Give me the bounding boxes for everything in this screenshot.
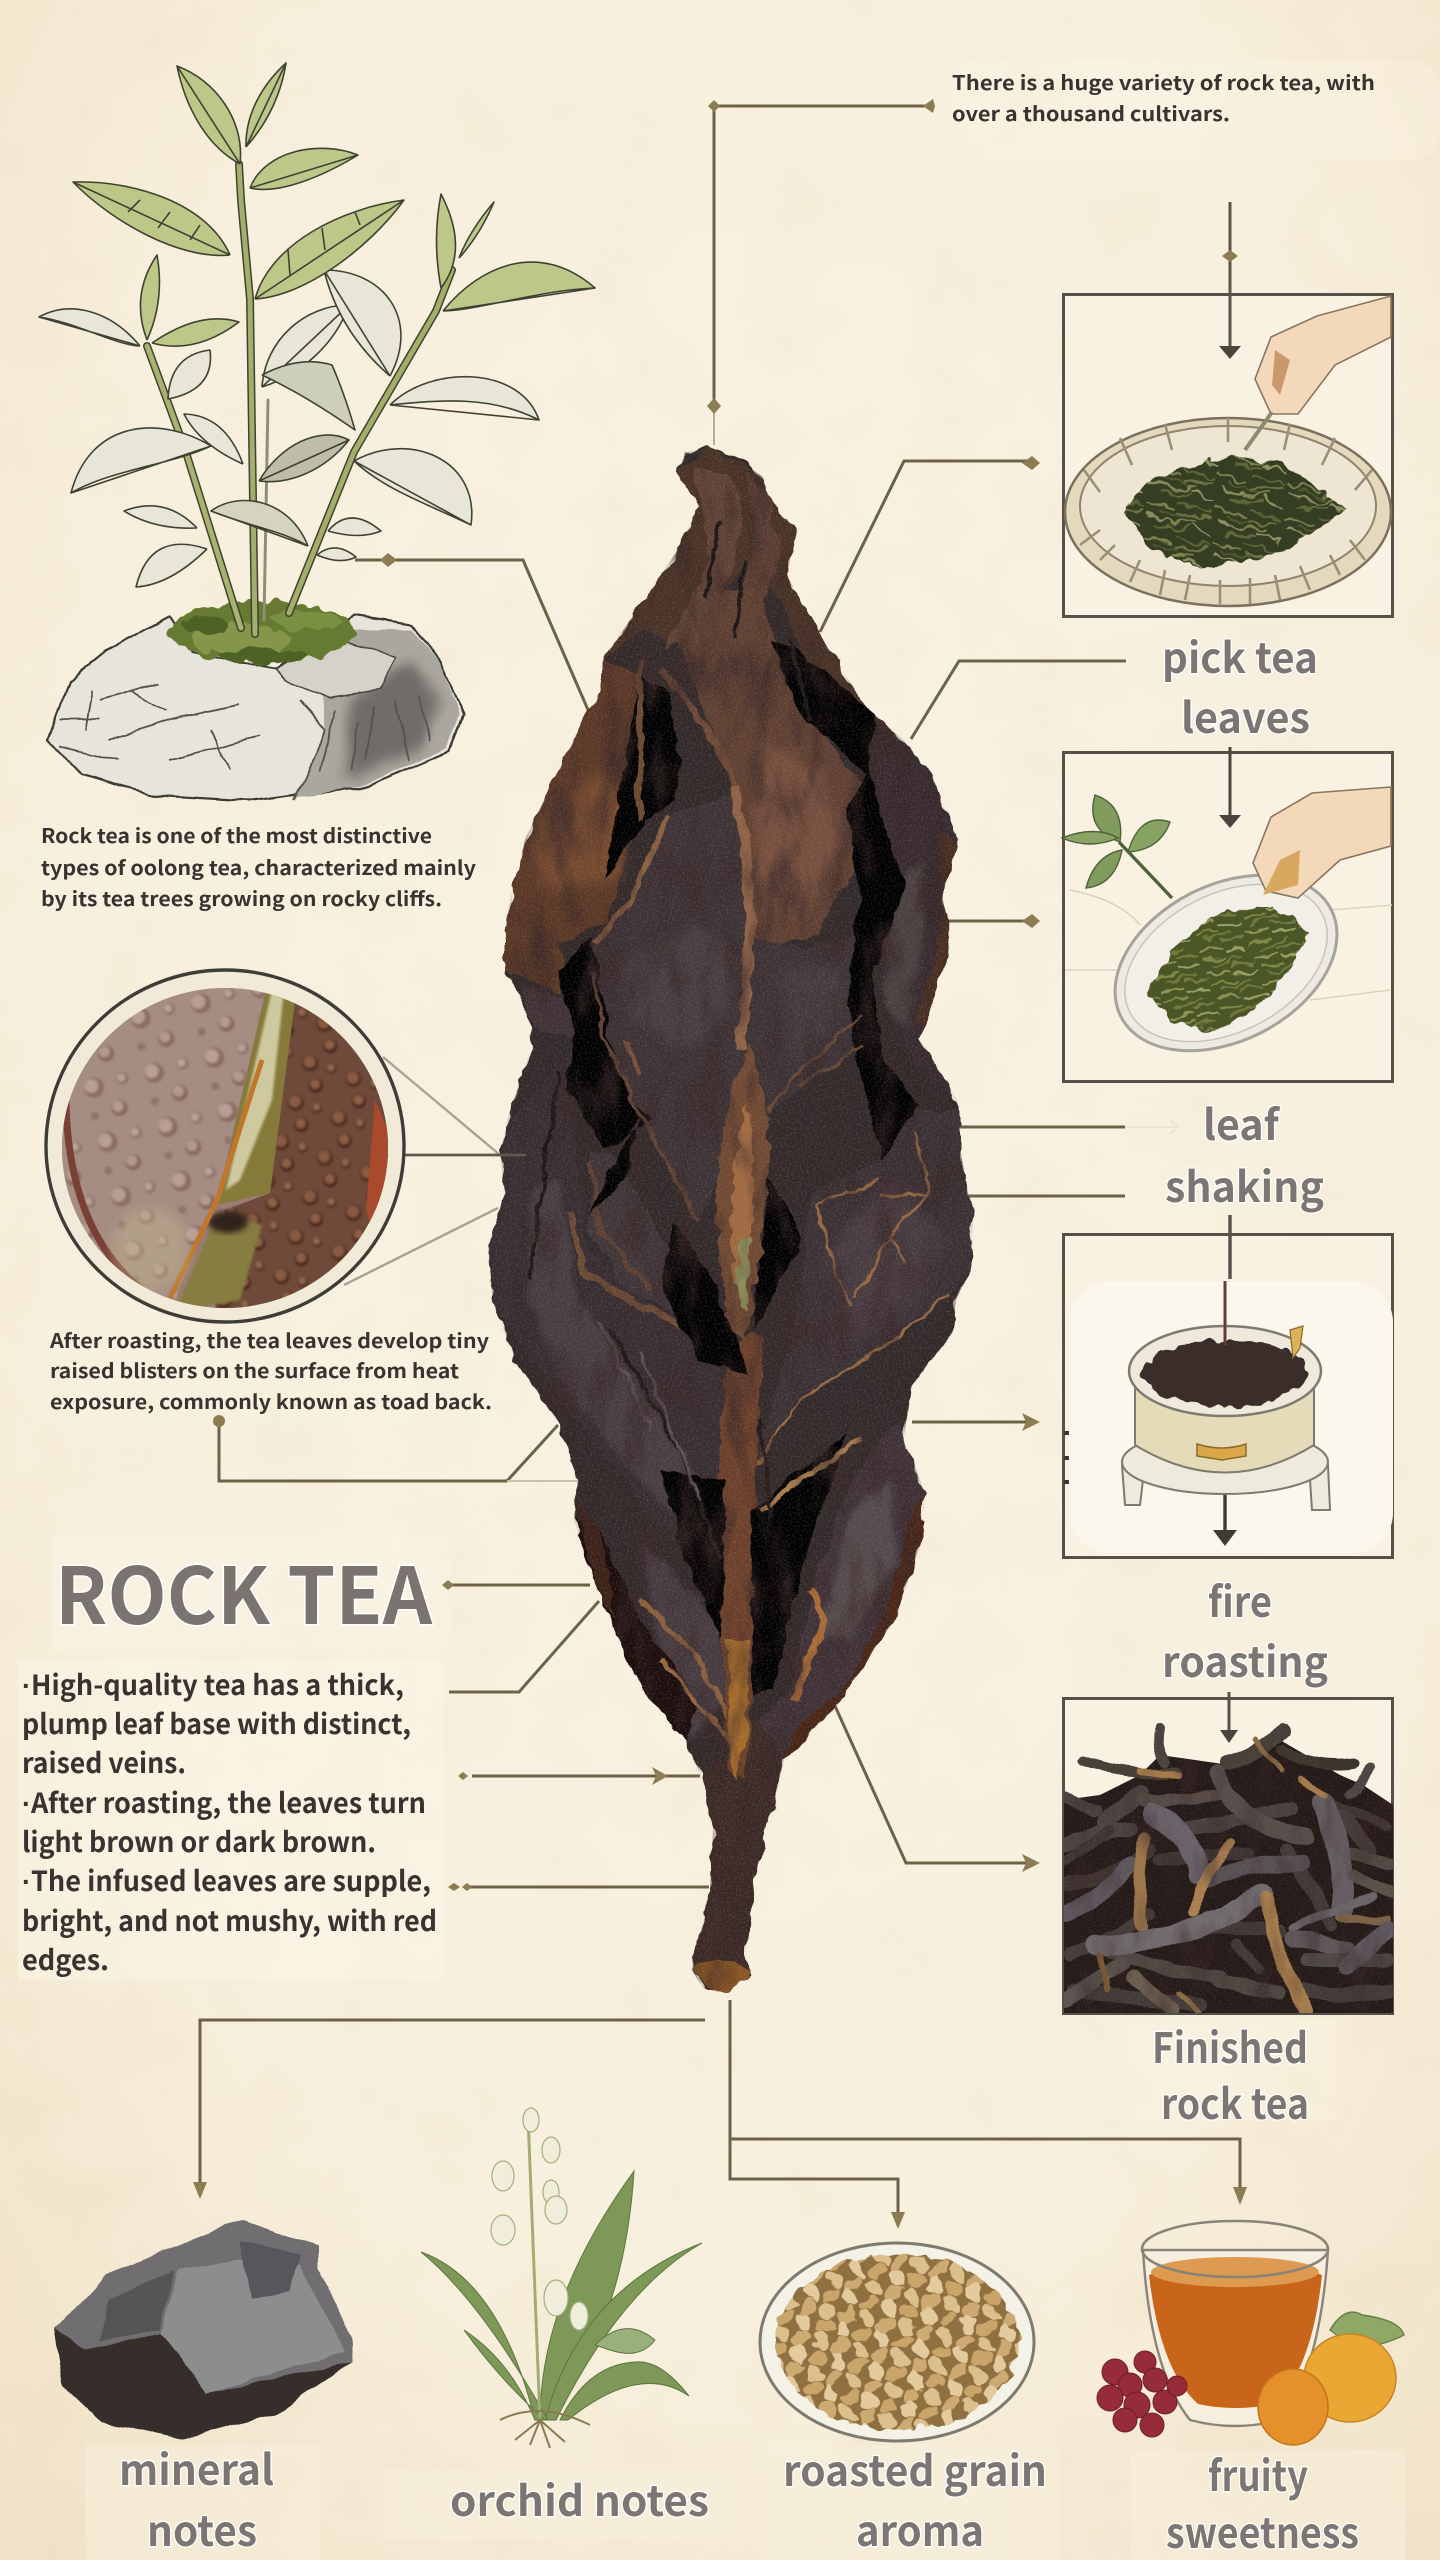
text: quality bullets: ·High-quality tea has a thick, (22, 1664, 404, 1704)
green upper leaves (73, 63, 595, 346)
text: quality bullets: ·The infused leaves are supple, (22, 1860, 431, 1900)
connector: leaf to finished tea box (835, 1706, 1040, 1872)
connector: title to leaf (442, 1580, 590, 1590)
label: mineral notes: notes (147, 2498, 257, 2559)
roasting basket on stand (1122, 1326, 1330, 1510)
text: quality bullets (22, 1664, 437, 1979)
text: toad back description (49, 1325, 492, 1415)
label: leaf shaking (1165, 1092, 1324, 1215)
panel: fire roasting box (1064, 1234, 1393, 1558)
label: fire roasting: roasting (1162, 1629, 1328, 1690)
label: roasted grain aroma: aroma (856, 2498, 984, 2559)
label: roasted grain aroma (783, 2438, 1047, 2559)
illustration: orchid (421, 2108, 702, 2448)
moss (170, 601, 354, 663)
text: rock tea description: Rock tea is one of the most distinctive (41, 820, 432, 849)
oranges (1258, 2334, 1396, 2445)
green leaf (1330, 2312, 1404, 2346)
label: pick tea leaves (1162, 625, 1318, 746)
stems (147, 164, 452, 634)
connector: leaf to pick tea label (911, 661, 1126, 739)
connector: leaf to leaf shaking label (960, 1120, 1178, 1196)
rock base (48, 616, 464, 801)
text: toad back description: After roasting, the tea leaves develop tiny (49, 1325, 490, 1354)
red berries (1097, 2351, 1187, 2437)
picking hand (1245, 296, 1391, 450)
text: quality bullets: plump leaf base with distinct, (22, 1703, 411, 1743)
tea sprig (1062, 795, 1172, 898)
white plate of tea (1085, 840, 1367, 1086)
connector: leaf to picking box (820, 456, 1040, 632)
finished dry tea pile (1064, 1700, 1393, 2013)
title: ROCK TEA (55, 1535, 433, 1647)
label: pick tea leaves: pick tea (1162, 625, 1318, 686)
connector: infused bullet to petiole (448, 1883, 709, 1891)
text: rock tea description: types of oolong tea, characterized mainly (41, 852, 477, 881)
text: quality bullets: raised veins. (22, 1742, 186, 1782)
central rock tea leaf (480, 440, 980, 2000)
label: finished rock tea (1152, 2015, 1309, 2132)
glass of amber tea (1142, 2221, 1328, 2426)
illustration: roasted grain plate (760, 2243, 1034, 2441)
text: quality bullets: ·After roasting, the leaves turn (22, 1782, 426, 1822)
label: fruity sweetness (1166, 2443, 1359, 2560)
panel: leaf shaking box (1062, 752, 1392, 1086)
arrow into pick tea box (1219, 202, 1241, 359)
text: rock tea description: by its tea trees growing on rocky cliffs. (41, 883, 442, 912)
arrow into finished tea box (1220, 1692, 1238, 1743)
connector: colour bullet to leaf (458, 1767, 700, 1785)
arrow into leaf shaking box (1219, 747, 1241, 828)
tea plant on rock illustration (39, 63, 595, 801)
connector: quality bullets to leaf (449, 1601, 599, 1692)
connector: toad back text to leaf (213, 1415, 578, 1481)
label: fruity sweetness: sweetness (1166, 2500, 1359, 2560)
panel: pick tea leaves box (1064, 294, 1392, 616)
blistered leaf macro (60, 985, 392, 1315)
connector: magnifier lines to leaf (344, 1057, 526, 1285)
connector: flavour tree from leaf stem (193, 2000, 1247, 2229)
text: quality bullets: edges. (22, 1939, 109, 1979)
illustration: mineral rock (55, 2220, 354, 2439)
text: toad back description: raised blisters on the surface from heat (50, 1355, 460, 1384)
text: cultivars note: There is a huge variety of rock tea, with (952, 67, 1375, 96)
text: toad back description: exposure, commonly known as toad back. (50, 1386, 492, 1415)
label: fruity sweetness: fruity (1208, 2443, 1308, 2504)
connector: leaf tip to cultivars note (707, 99, 935, 445)
green tea pile (1122, 456, 1344, 568)
text: cultivars note: over a thousand cultivars. (952, 98, 1230, 127)
arrow through fire roasting box (1213, 1215, 1237, 1546)
label: mineral notes (119, 2437, 274, 2559)
text: quality bullets: light brown or dark brown. (22, 1821, 376, 1861)
grey lower leaves (39, 270, 539, 587)
label: roasted grain aroma: roasted grain (783, 2438, 1047, 2499)
label: finished rock tea: rock tea (1161, 2071, 1309, 2132)
connector: plant to leaf (355, 553, 592, 719)
hand holding leaves (1253, 787, 1391, 898)
label: leaf shaking: shaking (1165, 1154, 1324, 1215)
label: fire roasting: fire (1208, 1569, 1272, 1630)
label: orchid notes: orchid notes (450, 2468, 709, 2529)
connector: leaf to roasting box (912, 1413, 1040, 1431)
text: quality bullets: bright, and not mushy, with red (22, 1900, 437, 1940)
text: rock tea description (41, 820, 477, 912)
woven basket (1065, 418, 1391, 606)
label: finished rock tea: Finished (1152, 2015, 1308, 2076)
magnified toad back circle (46, 970, 404, 1322)
text: cultivars note (952, 67, 1375, 127)
illustration: tea glass with fruit (1097, 2221, 1404, 2445)
connector: leaf to second box (922, 914, 1040, 928)
panel: finished rock tea box (1064, 1698, 1393, 2014)
label: fire roasting (1162, 1569, 1328, 1690)
label: leaf shaking: leaf (1203, 1092, 1280, 1153)
label: pick tea leaves: leaves (1181, 685, 1310, 746)
fuzzy bud (716, 1043, 769, 1340)
label: mineral notes: mineral (119, 2437, 274, 2498)
